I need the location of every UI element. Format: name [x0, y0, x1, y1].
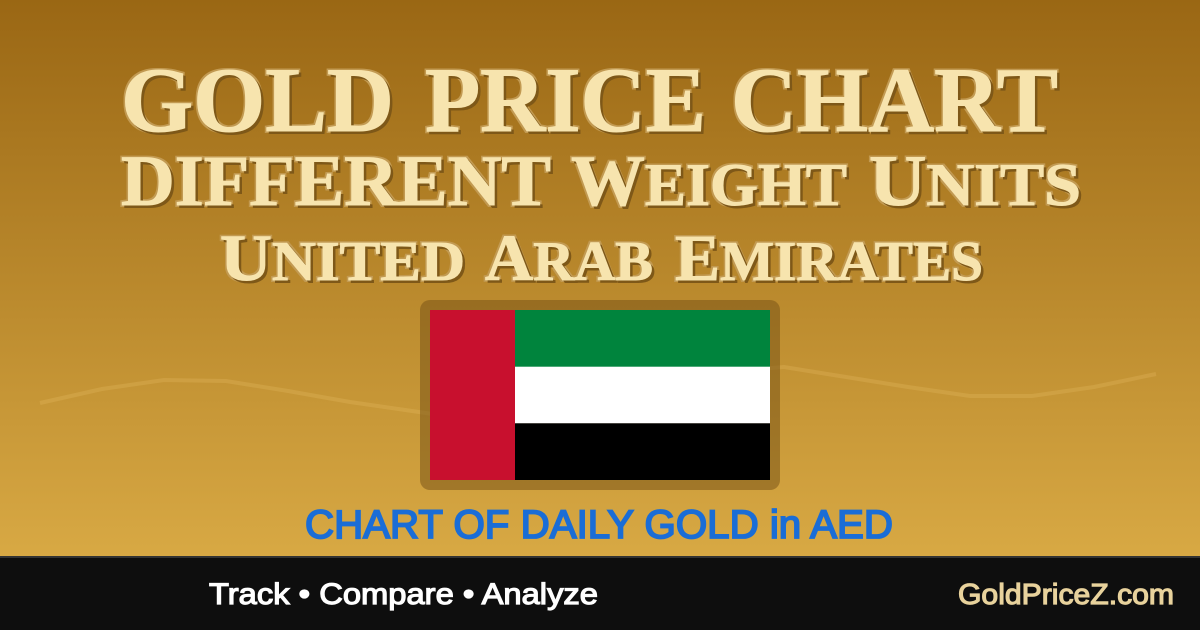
- subtitle: different weight units: UNITS: [869, 141, 1081, 221]
- background price line: [40, 367, 1156, 420]
- subtitle: united arab emirates: ARAB: [485, 222, 653, 295]
- title: gold price chart: CHART: [731, 49, 1058, 151]
- subtitle: different weight units: DIFFERENT: [121, 141, 551, 221]
- title: gold price chart: [121, 49, 1058, 151]
- flag frame: [420, 300, 780, 490]
- subtitle: united arab emirates: EMIRATES: [675, 222, 983, 295]
- heading: chart of daily gold in AED: CHART OF DAILY GOLD in AED: [305, 503, 893, 547]
- brand name: GoldPriceZ.com: [958, 579, 1174, 611]
- icon: UAE flag: [430, 310, 770, 480]
- footer bar: [0, 556, 1200, 630]
- subtitle: united arab emirates: [220, 222, 983, 295]
- title: gold price chart: PRICE: [425, 49, 706, 151]
- tagline: Track • Compare • Analyze: [209, 578, 598, 611]
- subtitle: different weight units: [121, 141, 1081, 221]
- subtitle: different weight units: WEIGHT: [571, 141, 847, 221]
- title: gold price chart: GOLD: [121, 49, 394, 151]
- subtitle: united arab emirates: UNITED: [220, 222, 465, 295]
